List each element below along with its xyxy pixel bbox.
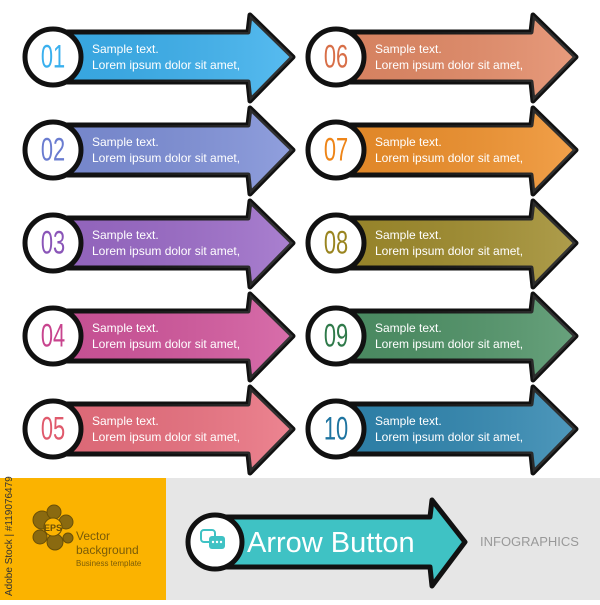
arrow 01 [25,15,293,101]
arrow 02: 02 [41,131,65,167]
arrow 10: 10 [324,410,348,446]
arrow 04: Sample text. [92,321,159,335]
arrow 05: 05 [41,410,65,446]
big arrow button [188,500,465,586]
arrow 02: Lorem ipsum dolor sit amet, [92,151,240,165]
arrow 03: Lorem ipsum dolor sit amet, [92,244,240,258]
arrow 09 [308,294,576,380]
background bottom yellow panel [0,478,166,600]
arrow 05: Lorem ipsum dolor sit amet, [92,430,240,444]
arrow 10: Sample text. [375,414,442,428]
arrow 06 [308,15,576,101]
icon: EPS badge: EPS [44,523,62,533]
stock id vertical text: Adobe Stock | #119076479 [4,476,15,596]
label: Vector background: Vector [76,529,110,543]
icon: EPS badge [33,505,73,550]
arrow 07: Sample text. [375,135,442,149]
arrow 03: Sample text. [92,228,159,242]
arrow 07 [308,108,576,194]
background bottom gray panel [166,478,600,600]
arrow 01: Sample text. [92,42,159,56]
arrow 06: Sample text. [375,42,442,56]
label: Vector background: background [76,543,139,557]
arrow 05: Sample text. [92,414,159,428]
arrow 08: 08 [324,224,348,260]
label: INFOGRAPHICS: INFOGRAPHICS [480,534,579,549]
arrow 03: 03 [41,224,65,260]
arrow 04: 04 [41,317,65,353]
arrow 07: 07 [324,131,348,167]
big arrow button: Arrow Button [247,527,415,559]
arrow 08 [308,201,576,287]
arrow 04 [25,294,293,380]
label: Vector background: Business template [76,559,142,568]
arrow 02: Sample text. [92,135,159,149]
arrow 03 [25,201,293,287]
arrow 07: Lorem ipsum dolor sit amet, [375,151,523,165]
icon: chat bubbles [201,530,225,549]
arrow 09: Lorem ipsum dolor sit amet, [375,337,523,351]
arrow 08: Sample text. [375,228,442,242]
arrow 01: 01 [41,38,65,74]
arrow 10: Lorem ipsum dolor sit amet, [375,430,523,444]
arrow 04: Lorem ipsum dolor sit amet, [92,337,240,351]
arrow 06: 06 [324,38,348,74]
arrow 06: Lorem ipsum dolor sit amet, [375,58,523,72]
arrow 10 [308,387,576,473]
arrow 09: Sample text. [375,321,442,335]
arrow 08: Lorem ipsum dolor sit amet, [375,244,523,258]
arrow 09: 09 [324,317,348,353]
arrow 01: Lorem ipsum dolor sit amet, [92,58,240,72]
label: Vector background [76,529,142,568]
arrow 02 [25,108,293,194]
arrow 05 [25,387,293,473]
